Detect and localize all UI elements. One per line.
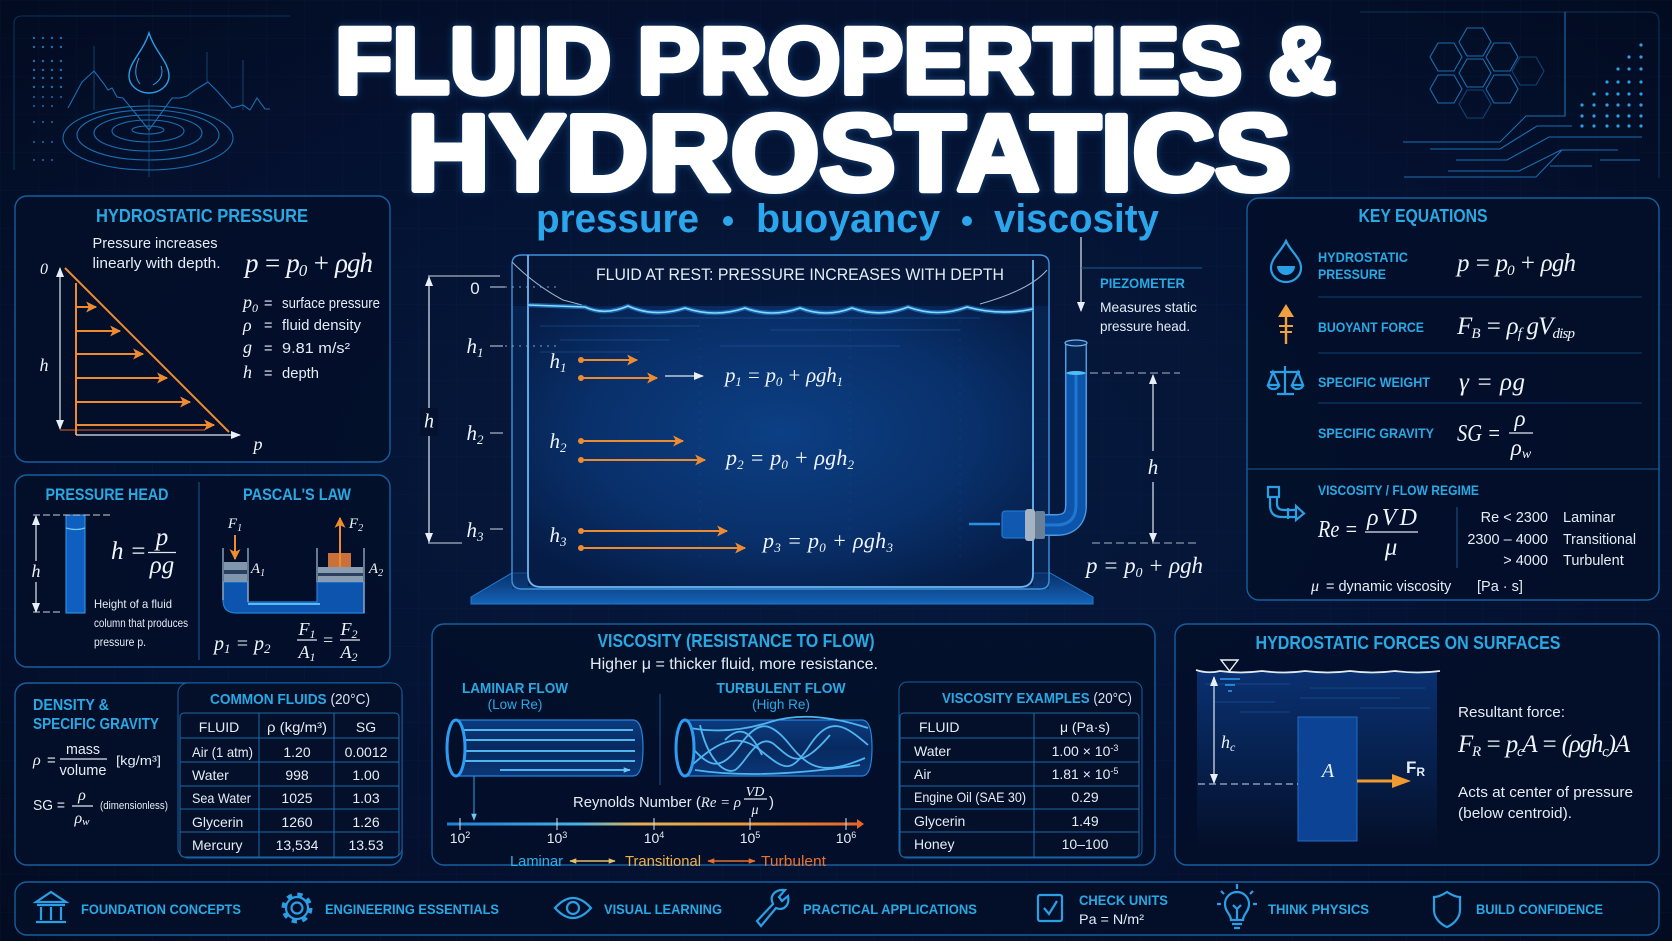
equation block: viscosity and flow regime: [1310, 482, 1636, 595]
equation row: buoyant force: BUOYANT FORCE: [1318, 319, 1424, 335]
variable legend: 0: [252, 301, 258, 315]
formula: Pascal's law: =: [322, 630, 334, 650]
equation row: buoyant force: gV: [1521, 313, 1556, 340]
flow regime legend: Turbulent: [761, 853, 827, 870]
Reynolds number formula: [573, 785, 774, 818]
central diagram: fluid tank: [420, 237, 1203, 604]
table: common fluids: 1.20: [283, 744, 311, 760]
submerged surface diagram: R: [1416, 765, 1425, 779]
icon: pipe: [1268, 487, 1304, 520]
piezometer tube: [969, 340, 1087, 541]
piezometer head dimension: + ρgh: [1142, 553, 1203, 578]
table: common fluids: 0.0012: [345, 744, 388, 760]
equation block: viscosity and flow regime: 2300 – 4000: [1467, 532, 1548, 548]
resultant force text: A = (ρgh: [1520, 731, 1603, 758]
description: pressure head: Height of a fluid: [94, 597, 172, 611]
equation block: viscosity and flow regime: Laminar: [1563, 510, 1616, 526]
icon: buoyancy arrow: [1278, 304, 1294, 344]
piezometer label: Measures static: [1100, 299, 1197, 315]
depth h1 pressure arrows: + ρgh: [782, 363, 837, 387]
left depth scale: 2: [477, 432, 484, 447]
left depth scale: h: [424, 411, 434, 433]
Reynolds scale: 4: [659, 830, 664, 840]
variable legend: depth: [282, 366, 319, 382]
table: common fluids: [178, 683, 402, 858]
depth h1 pressure arrows: [550, 349, 843, 389]
formula: pressure head: [111, 524, 176, 579]
submerged surface diagram: F: [1406, 758, 1416, 777]
heading: density: DENSITY &: [33, 697, 109, 714]
table: viscosity examples: Glycerin: [914, 813, 965, 829]
variable legend: h: [243, 362, 252, 382]
equation block: viscosity and flow regime: ρVD: [1366, 505, 1417, 531]
subtitle: buoyancy: [756, 197, 941, 241]
piezometer label: PIEZOMETER: [1100, 275, 1185, 291]
formula: pressure head: ρg: [149, 552, 174, 579]
footer item: check units: Pa = N/m²: [1079, 911, 1144, 927]
variable legend: =: [264, 366, 272, 382]
table: common fluids: SG: [356, 719, 376, 735]
heading: hydrostatic forces: HYDROSTATIC FORCES ON SURFACES: [1256, 633, 1560, 653]
tank base: [471, 573, 1093, 604]
depth h2 pressure arrows: = p: [744, 445, 781, 470]
description: viscosity: Higher μ = thicker fluid, more resistance.: [590, 656, 878, 673]
hydraulic press diagram: F: [349, 516, 358, 532]
table: viscosity examples: 1.00 × 10: [1052, 743, 1110, 759]
depth h1 pressure arrows: 0: [776, 374, 783, 389]
equation row: specific gravity: ρ: [1513, 406, 1526, 431]
equation row: hydrostatic pressure: PRESSURE: [1318, 266, 1386, 282]
submerged surface diagram: A: [1320, 760, 1335, 782]
formula: + ρgh: [306, 248, 373, 278]
footer item: think physics: THINK PHYSICS: [1268, 901, 1369, 917]
depth h3 pressure arrows: 0: [819, 540, 826, 555]
depth h2 pressure arrows: [550, 429, 854, 472]
equation row: hydrostatic pressure: p = p: [1457, 250, 1508, 277]
flow regime legend: Laminar: [510, 853, 563, 870]
resultant force text: c: [1517, 744, 1524, 760]
Reynolds scale: 2: [465, 830, 470, 840]
Reynolds scale: 10: [644, 830, 659, 846]
table: viscosity examples: Honey: [914, 836, 954, 852]
heading: viscosity: VISCOSITY (RESISTANCE TO FLOW): [598, 631, 874, 651]
depth h3 pressure arrows: 3: [886, 540, 894, 555]
variable legend: ρ: [242, 315, 252, 335]
table: viscosity examples: 1.81 × 10: [1052, 766, 1110, 782]
equation row: specific gravity: [1318, 406, 1533, 462]
description: pressure head: [94, 597, 188, 649]
piezometer head dimension: h: [1148, 455, 1158, 479]
Reynolds scale: [447, 776, 864, 846]
formula: density: =: [47, 752, 56, 769]
decoration: water drop and ripples: [14, 16, 290, 177]
table: viscosity examples: -5: [1110, 766, 1118, 776]
resultant force text: R: [1471, 744, 1481, 760]
piezometer head dimension: [1084, 373, 1203, 581]
heading: hydrostatic pressure: HYDROSTATIC PRESSURE: [96, 205, 308, 226]
equation row: specific gravity: w: [1522, 447, 1532, 462]
Reynolds scale: 10: [450, 830, 465, 846]
equation row: hydrostatic pressure: + ρgh: [1514, 250, 1576, 277]
equation row: buoyant force: B: [1471, 326, 1481, 342]
table: common fluids: Sea Water: [192, 790, 251, 806]
footer item: build confidence: BUILD CONFIDENCE: [1476, 901, 1603, 917]
left depth scale: 0: [470, 279, 480, 298]
equation row: specific weight: SPECIFIC WEIGHT: [1318, 374, 1430, 390]
heading: key equations: KEY EQUATIONS: [1358, 206, 1488, 226]
footer item: foundation concepts: [36, 892, 241, 922]
description: [92, 235, 220, 272]
hydraulic press diagram: A: [251, 561, 260, 577]
Reynolds scale: 6: [851, 830, 856, 840]
title: [335, 8, 1336, 213]
table: common fluids: Glycerin: [192, 814, 243, 830]
formula: Pascal's law: [212, 619, 360, 664]
description: Pressure increases: [92, 235, 218, 252]
Reynolds scale: 5: [755, 830, 760, 840]
heading: Pascal's law: PASCAL'S LAW: [243, 485, 352, 504]
table: viscosity examples: 1.49: [1071, 813, 1099, 829]
resultant force text: )A: [1606, 731, 1631, 758]
equation block: viscosity and flow regime: μ: [1310, 578, 1319, 595]
equation block: viscosity and flow regime: [Pa · s]: [1477, 579, 1523, 595]
left depth scale: 3: [476, 529, 484, 544]
hydraulic press diagram: 2: [378, 568, 383, 579]
depth h3 pressure arrows: 3: [773, 540, 781, 555]
turbulent flow labels: (High Re): [752, 697, 810, 712]
equation row: specific gravity: ρ: [1511, 435, 1522, 460]
heading: density: SPECIFIC GRAVITY: [33, 716, 159, 733]
subtitle: viscosity: [994, 197, 1160, 241]
formula: specific gravity: [33, 787, 168, 828]
table: viscosity examples: Air: [914, 766, 931, 782]
equation block: viscosity and flow regime: Re < 2300: [1481, 510, 1548, 526]
table: common fluids: 1.03: [352, 790, 380, 806]
depth h1 pressure arrows: p: [725, 363, 736, 387]
footer item: check units: [1038, 892, 1168, 927]
table: common fluids: Air (1 atm): [192, 744, 253, 760]
footer item: engineering essentials: ENGINEERING ESSENTIALS: [325, 901, 499, 917]
footer item: practical applications: PRACTICAL APPLICATIONS: [803, 901, 977, 917]
variable legend: 9.81 m/s²: [282, 341, 350, 357]
formula: density: mass: [66, 741, 100, 758]
depth h1 pressure arrows: = p: [742, 363, 776, 387]
depth h2 pressure arrows: 0: [781, 457, 788, 472]
resultant force text: Acts at center of pressure: [1458, 784, 1633, 801]
formula: 0: [299, 261, 308, 280]
formula: Pascal's law: A: [340, 642, 352, 662]
table: viscosity examples: [899, 682, 1142, 858]
water surface: [528, 305, 1033, 313]
depth h3 pressure arrows: = p: [781, 528, 819, 553]
pressure triangle chart: 0: [40, 261, 48, 278]
table: common fluids: FLUID: [199, 719, 239, 735]
variable legend: =: [264, 296, 272, 312]
laminar flow labels: LAMINAR FLOW: [462, 680, 569, 697]
footer strip: [15, 882, 1659, 935]
equation row: specific weight: [1318, 369, 1525, 396]
formula: Pascal's law: 2: [352, 650, 358, 664]
laminar tube: [447, 720, 643, 776]
hydraulic press diagram: F: [228, 516, 237, 532]
formula: Pascal's law: 1: [310, 650, 316, 664]
fluid column: [32, 515, 110, 613]
table: viscosity examples: Engine Oil (SAE 30): [914, 789, 1026, 805]
table: common fluids: Water: [192, 767, 229, 783]
heading: density: [33, 697, 159, 733]
equation row: buoyant force: f: [1518, 326, 1524, 342]
equation row: hydrostatic pressure: 0: [1507, 263, 1515, 279]
hydraulic press diagram: [223, 516, 383, 613]
equation row: specific gravity: SG =: [1457, 421, 1501, 447]
Reynolds scale: 10: [836, 830, 851, 846]
table: common fluids: 13.53: [348, 837, 384, 853]
panel: hydrostatic pressure: [15, 196, 390, 462]
formula: density: ρ: [32, 752, 41, 769]
equation block: viscosity and flow regime: Turbulent: [1563, 553, 1624, 569]
left depth scale: 1: [477, 345, 484, 360]
flow regime legend: Transitional: [625, 853, 701, 870]
resultant force text: (below centroid).: [1458, 805, 1572, 822]
variable legend: [241, 292, 380, 382]
equation block: viscosity and flow regime: VISCOSITY / FLOW REGIME: [1318, 482, 1479, 498]
depth h1 pressure arrows: 1: [836, 374, 843, 389]
depth h2 pressure arrows: p: [726, 445, 737, 470]
submerged surface diagram: h: [1221, 732, 1230, 752]
variable legend: p: [243, 292, 252, 312]
formula: pressure head: h =: [111, 538, 147, 565]
description: pressure head: column that produces: [94, 616, 188, 630]
formula: Pascal's law: = p: [230, 633, 264, 655]
equation row: specific weight: γ = ρg: [1459, 369, 1525, 396]
Reynolds number formula: ): [769, 794, 774, 811]
piezometer head dimension: p = p: [1086, 553, 1136, 578]
hydraulic press diagram: 1: [237, 523, 242, 534]
piezometer label: [1081, 237, 1202, 334]
formula: density: volume: [60, 762, 106, 779]
depth h3 pressure arrows: p: [763, 528, 774, 553]
depth h1 pressure arrows: 1: [560, 360, 566, 375]
footer item: engineering essentials: [284, 895, 499, 921]
depth h3 pressure arrows: [550, 523, 894, 555]
icon: scales: [1268, 366, 1303, 394]
table: viscosity examples: μ (Pa·s): [1060, 719, 1110, 735]
formula: Pascal's law: F: [340, 619, 352, 639]
formula: specific gravity: ρ: [77, 787, 86, 804]
depth h1 pressure arrows: h: [550, 349, 560, 373]
heading: pressure head: PRESSURE HEAD: [46, 485, 168, 504]
footer item: visual learning: VISUAL LEARNING: [604, 901, 722, 917]
Reynolds number formula: VD: [746, 785, 764, 800]
pressure triangle chart: h: [40, 355, 48, 375]
table: common fluids: 998: [285, 767, 309, 783]
turbulent tube: [676, 717, 872, 776]
title: FLUID PROPERTIES &: [335, 8, 1336, 113]
flow regime legend: [510, 853, 827, 870]
description: pressure head: pressure p.: [94, 635, 146, 649]
depth h3 pressure arrows: + ρgh: [826, 528, 886, 553]
table: common fluids: 1.26: [352, 814, 380, 830]
depth h3 pressure arrows: h: [550, 523, 560, 547]
equation row: buoyant force: disp: [1553, 326, 1576, 342]
depth h2 pressure arrows: 2: [848, 457, 854, 472]
Reynolds scale: 3: [562, 830, 567, 840]
resultant force text: F: [1458, 731, 1473, 758]
formula: Pascal's law: A: [298, 642, 310, 662]
table: viscosity examples: Water: [914, 743, 951, 759]
title: HYDROSTATICS: [407, 92, 1291, 213]
equation block: viscosity and flow regime: μ: [1384, 534, 1397, 561]
depth h3 pressure arrows: 3: [559, 534, 567, 549]
Reynolds scale: 10: [547, 830, 562, 846]
table: common fluids: 13,534: [276, 837, 319, 853]
description: linearly with depth.: [92, 255, 220, 272]
formula: density: [32, 741, 161, 779]
table: viscosity examples: 0.29: [1071, 789, 1099, 805]
formula: Pascal's law: 2: [264, 641, 271, 656]
subtitle: [536, 197, 1160, 241]
footer item: visual learning: [555, 898, 722, 918]
footer item: foundation concepts: FOUNDATION CONCEPTS: [81, 901, 241, 917]
variable legend: surface pressure: [282, 296, 380, 312]
equation row: specific gravity: SPECIFIC GRAVITY: [1318, 425, 1435, 441]
panel: key equations: [1247, 198, 1659, 600]
variable legend: =: [264, 318, 272, 334]
table: viscosity examples: FLUID: [919, 719, 959, 735]
hydraulic press diagram: A: [369, 561, 378, 577]
tank caption: FLUID AT REST: PRESSURE INCREASES WITH DEPTH: [596, 266, 1004, 284]
hydraulic press diagram: 2: [358, 523, 363, 534]
table: common fluids: 1.00: [352, 767, 380, 783]
tank water: [512, 306, 1049, 589]
depth h2 pressure arrows: + ρgh: [788, 445, 847, 470]
table: viscosity examples: -3: [1110, 743, 1118, 753]
decoration: hexagons and circuit traces: [1360, 12, 1659, 178]
fluid column: h: [32, 561, 40, 581]
depth h2 pressure arrows: h: [550, 429, 560, 453]
equation block: viscosity and flow regime: Transitional: [1563, 532, 1636, 548]
laminar flow labels: (Low Re): [488, 697, 542, 712]
panel: hydrostatic forces on surfaces: [1175, 624, 1659, 865]
depth h2 pressure arrows: 2: [560, 440, 567, 455]
footer item: check units: CHECK UNITS: [1079, 892, 1168, 908]
formula: density: [kg/m³]: [116, 753, 161, 768]
table: common fluids: ρ (kg/m³): [267, 719, 327, 735]
resultant force text: = p: [1480, 731, 1518, 758]
piezometer head dimension: 0: [1136, 566, 1143, 581]
left depth scale: h: [466, 518, 477, 542]
equation row: hydrostatic pressure: HYDROSTATIC: [1318, 249, 1408, 265]
left depth scale: h: [466, 421, 477, 445]
equation row: buoyant force: [1318, 313, 1576, 342]
table: common fluids: 1025: [281, 790, 313, 806]
table: common fluids: Mercury: [192, 837, 243, 853]
formula: Pascal's law: F: [298, 619, 310, 639]
depth h1 pressure arrows: 1: [735, 374, 742, 389]
Reynolds number formula: Reynolds Number (Re = ρ: [573, 794, 741, 811]
left depth scale: h: [466, 334, 477, 358]
equation row: buoyant force: F: [1457, 313, 1472, 340]
subtitle: pressure: [536, 197, 699, 241]
formula: pressure head: p: [154, 524, 168, 551]
depth h2 pressure arrows: 2: [737, 457, 744, 472]
footer item: think physics: [1217, 884, 1369, 928]
resultant force text: [1457, 704, 1633, 822]
submerged surface diagram: [1196, 660, 1440, 848]
panel: viscosity: [432, 624, 1155, 870]
formula: Pascal's law: 1: [224, 641, 230, 656]
turbulent flow labels: [716, 680, 846, 712]
submerged surface diagram: c: [1230, 740, 1236, 754]
left depth scale: [420, 276, 560, 544]
formula: specific gravity: w: [82, 816, 90, 828]
formula: p = p: [245, 248, 300, 278]
footer item: build confidence: [1434, 892, 1603, 927]
tank walls: [512, 255, 1049, 589]
pressure triangle chart: [40, 261, 262, 454]
icon: water drop: [1271, 241, 1301, 282]
resultant force text: c: [1602, 744, 1609, 760]
variable legend: =: [264, 341, 272, 357]
table: viscosity examples: VISCOSITY EXAMPLES (20°C): [942, 690, 1132, 707]
resultant force text: Resultant force:: [1458, 704, 1565, 721]
table: common fluids: 1260: [281, 814, 313, 830]
formula: specific gravity: ρ: [74, 810, 82, 827]
hydraulic press diagram: 1: [260, 568, 265, 579]
formula: Pascal's law: 2: [352, 627, 358, 641]
table: viscosity examples: 10–100: [1062, 836, 1109, 852]
equation block: viscosity and flow regime: = dynamic viscosity: [1326, 579, 1452, 595]
laminar flow labels: [462, 680, 569, 712]
piezometer label: pressure head.: [1100, 318, 1190, 334]
formula: specific gravity: (dimensionless): [100, 800, 168, 812]
panel: pressure head and Pascal's law: [15, 475, 390, 667]
formula: Pascal's law: p: [214, 633, 224, 655]
formula: specific gravity: SG =: [33, 797, 65, 814]
equation row: hydrostatic pressure: [1318, 249, 1576, 282]
Reynolds scale: 10: [740, 830, 755, 846]
variable legend: g: [243, 337, 252, 357]
turbulent flow labels: TURBULENT FLOW: [716, 680, 846, 697]
equation row: buoyant force: = ρ: [1480, 313, 1519, 340]
table: common fluids: COMMON FLUIDS (20°C): [210, 691, 370, 708]
variable legend: fluid density: [282, 318, 362, 334]
formula: Pascal's law: 1: [310, 627, 316, 641]
pressure triangle chart: p: [252, 434, 262, 454]
footer item: practical applications: [757, 890, 977, 926]
panel: density and specific gravity: [15, 683, 402, 865]
Reynolds number formula: μ: [750, 803, 759, 818]
equation block: viscosity and flow regime: Re =: [1317, 517, 1358, 543]
equation block: viscosity and flow regime: > 4000: [1503, 553, 1548, 569]
